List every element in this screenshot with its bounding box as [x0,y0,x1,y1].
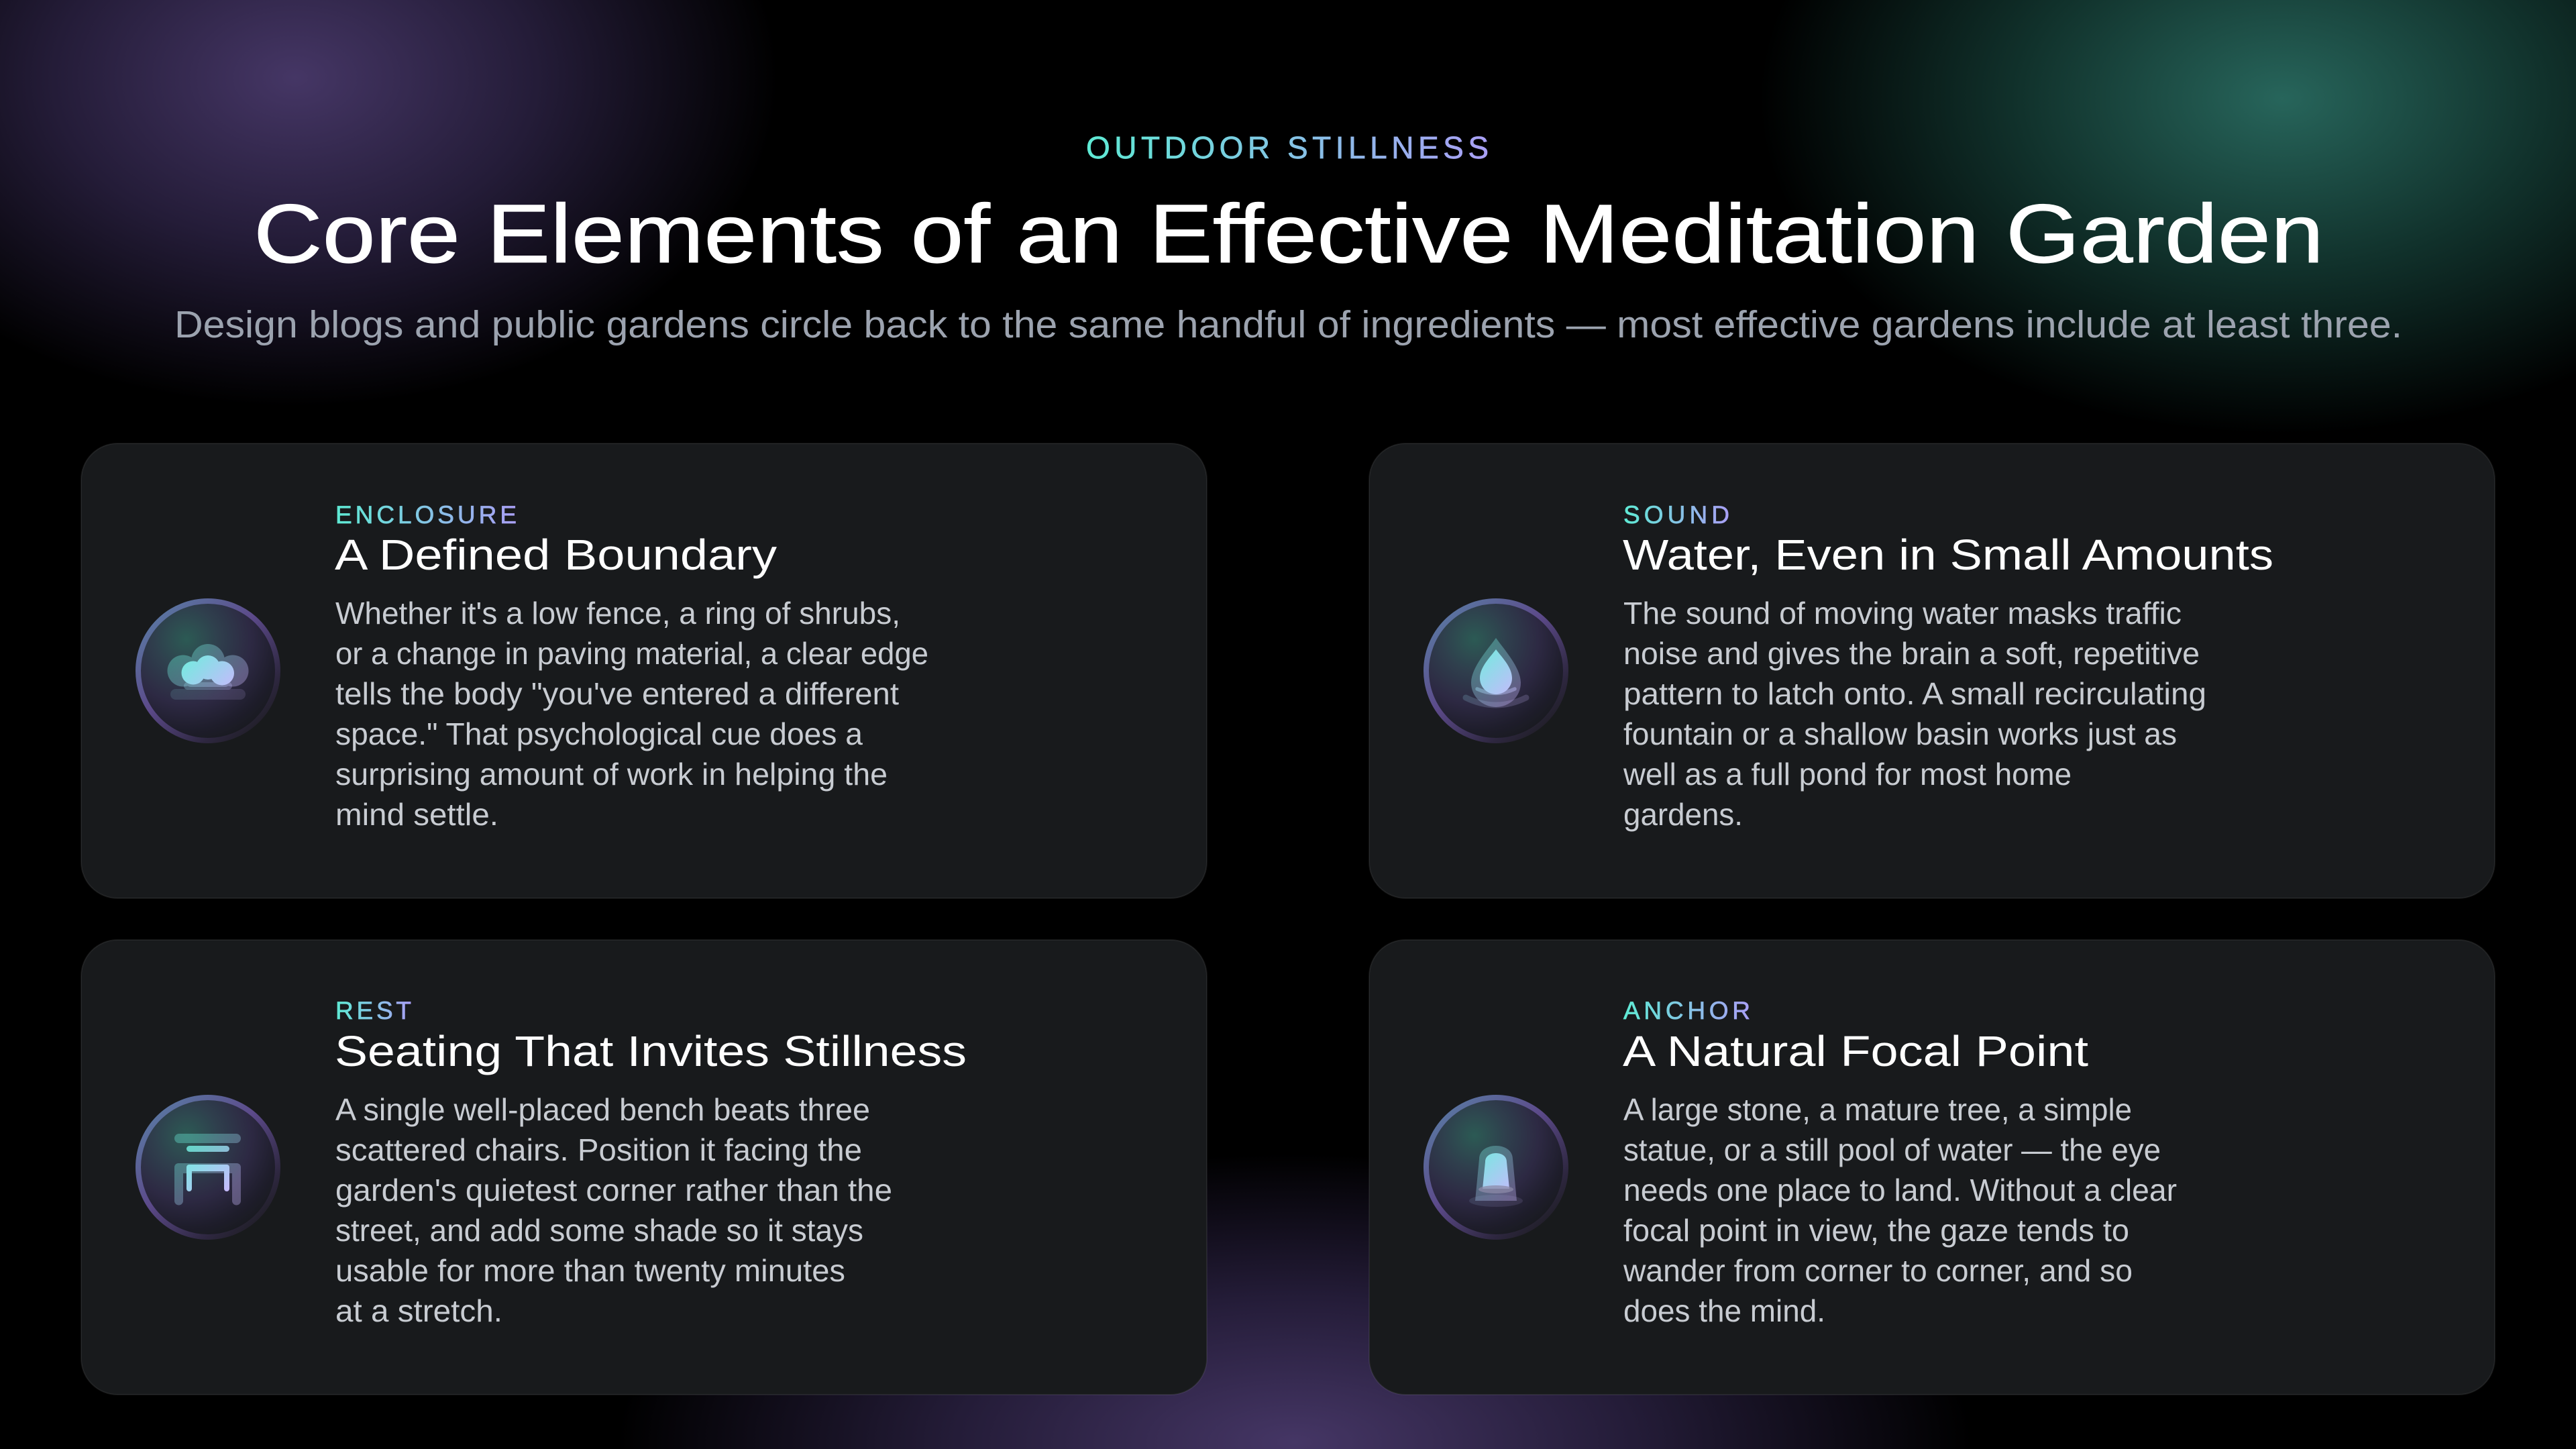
body text: focal point: needs one place to land. Without a clear [1623,1173,2177,1208]
body text: boundary: Whether it's a low fence, a ring of shrubs, [335,596,900,631]
body text: seating [335,1092,892,1328]
body text: boundary: space." That psychological cue does a [335,716,863,751]
body text: focal point: does the mind. [1623,1293,1825,1328]
card title: boundary: A Defined Boundary [335,531,777,579]
eyebrow: anchor: ANCHOR [1623,997,1750,1024]
icon: boundary cloud shrub [138,601,278,741]
body text: focal point: statue, or a still pool of water — the eye [1623,1132,2161,1167]
icon: bench [138,1097,278,1237]
subtitle: Design blogs and public gardens circle back to the same handful of ingredients — most effective gardens include at least three. [174,303,2402,346]
body text: water: gardens. [1623,797,1743,832]
background glow: top right teal [1759,0,2576,434]
title: Core Elements of an Effective Meditation Garden [254,188,2324,280]
panel: anchor [1369,940,2495,1395]
header [174,130,2402,346]
eyebrow: OUTDOOR STILLNESS [1086,130,1489,165]
background glow: top left purple [0,0,778,407]
body text: focal point [1623,1092,2177,1328]
body text: focal point: wander from corner to corner, and so [1623,1253,2133,1288]
body text: water: fountain or a shallow basin works just as [1623,716,2177,751]
eyebrow: enclosure: ENCLOSURE [335,501,517,529]
body text: seating: scattered chairs. Position it facing the [335,1132,862,1167]
eyebrow: sound: SOUND [1623,501,1729,529]
panel: enclosure [81,443,1207,898]
body text: boundary: tells the body "you've entered a different [335,676,899,711]
background glow: bottom purple [617,1154,1972,1449]
body text: water [1623,596,2206,832]
body text: seating: street, and add some shade so it stays [335,1213,863,1248]
body text: water: well as a full pond for most home [1623,757,2072,792]
body text: seating: garden's quietest corner rather than the [335,1173,892,1208]
body text: boundary: surprising amount of work in helping the [335,757,888,792]
card title: water: Water, Even in Small Amounts [1623,531,2273,579]
card title: seating: Seating That Invites Stillness [335,1027,967,1075]
eyebrow: rest: REST [335,997,411,1024]
body text: focal point: A large stone, a mature tree, a simple [1623,1092,2132,1127]
icon: focal stone [1426,1097,1566,1237]
body text: boundary: mind settle. [335,797,498,832]
body text: seating: at a stretch. [335,1293,502,1328]
body text: focal point: focal point in view, the gaze tends to [1623,1213,2129,1248]
body text: water: pattern to latch onto. A small recirculating [1623,676,2206,711]
icon: water drop [1426,601,1566,741]
body text: water: noise and gives the brain a soft, repetitive [1623,636,2200,671]
panel: rest [81,940,1207,1395]
body text: seating: A single well-placed bench beats three [335,1092,870,1127]
body text: boundary: or a change in paving material, a clear edge [335,636,928,671]
body text: seating: usable for more than twenty minutes [335,1253,845,1288]
card title: focal point: A Natural Focal Point [1623,1027,2088,1075]
body text: water: The sound of moving water masks traffic [1623,596,2182,631]
body text: boundary [335,596,928,832]
panel: sound [1369,443,2495,898]
